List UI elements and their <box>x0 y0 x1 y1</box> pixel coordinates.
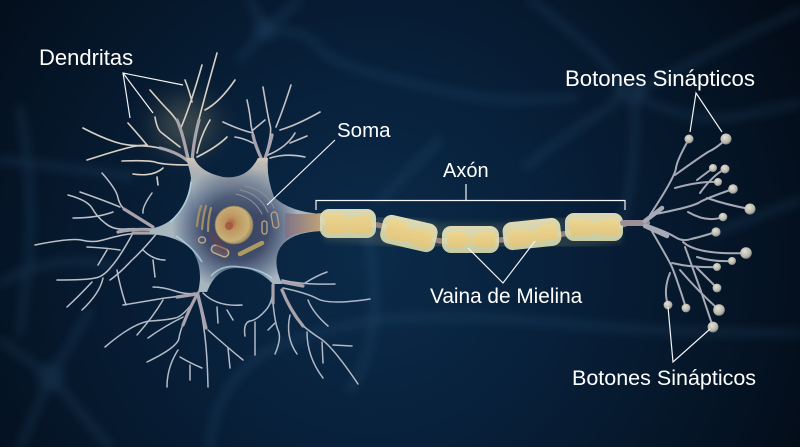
dendrites: top left <box>83 53 235 185</box>
myelin segment 3 <box>442 226 499 253</box>
label: Dendritas: Dendritas <box>39 45 133 70</box>
myelin segment 2 <box>378 213 439 254</box>
dendrites: top right <box>223 85 320 167</box>
dendrites: bottom right <box>245 272 370 384</box>
bottom boutons pointer <box>668 307 710 362</box>
axon bracket <box>316 184 625 210</box>
myelin pointer <box>468 241 535 283</box>
axon <box>320 222 626 241</box>
leader lines <box>123 73 722 362</box>
myelin glow <box>325 224 620 240</box>
myelin segment 4 <box>502 217 562 251</box>
myelin segment 1 <box>320 209 376 238</box>
label: Botones Sinápticos top: Botones Sinápticos <box>565 66 755 91</box>
myelin segment 5 <box>565 213 623 241</box>
label: Botones Sinápticos bottom: Botones Sinápticos <box>572 366 756 390</box>
label: Axón: Axón <box>443 160 489 182</box>
myelin sheath <box>320 209 623 254</box>
dendritas pointer <box>123 73 183 118</box>
soma pointer <box>267 140 335 205</box>
dendrites: left <box>35 173 165 310</box>
label: Vaina de Mielina: Vaina de Mielina <box>430 285 583 308</box>
dendrite trunks <box>118 120 303 328</box>
soma highlight <box>186 158 274 215</box>
dendrites: bottom left <box>105 287 243 387</box>
soma body <box>150 158 322 292</box>
rim light <box>170 182 272 278</box>
axon terminal branches <box>623 139 750 327</box>
organelles <box>197 186 279 258</box>
nucleolus <box>225 222 233 230</box>
nucleus <box>215 206 253 244</box>
synaptic boutons <box>664 134 756 332</box>
soma <box>150 158 322 292</box>
glow behind top dendrites <box>155 99 215 151</box>
top boutons pointer <box>690 93 722 132</box>
dendrites <box>35 53 370 387</box>
label: Soma: Soma <box>337 119 391 142</box>
axon root <box>285 213 322 239</box>
